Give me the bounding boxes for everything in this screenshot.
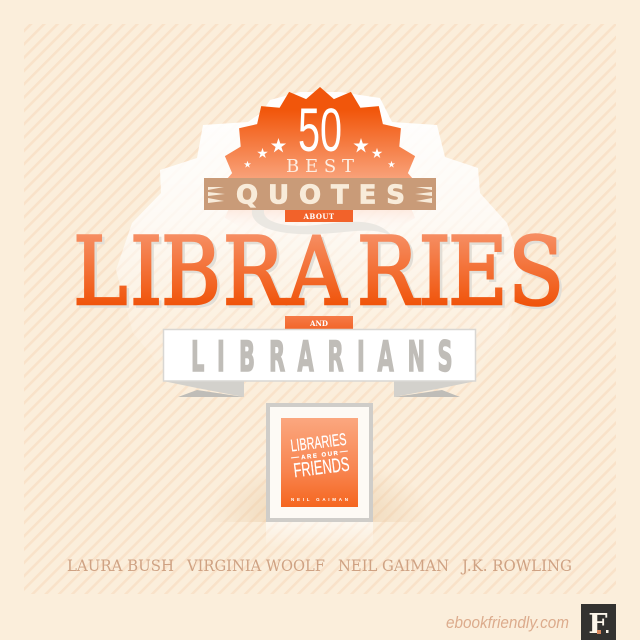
framed poster: FRIENDS [292,454,351,482]
framed poster [268,405,371,520]
QUOTES banner: QUOTES [236,180,405,210]
author names [67,557,572,575]
author names: LAURA BUSH [67,557,174,575]
LIBRARIES heading: LIBRARIES [73,217,564,326]
ABOUT tab [285,210,353,222]
framed poster: NEIL GAIMAN [291,497,348,502]
decorative swirl [252,210,392,236]
stars [244,138,395,168]
number 50: 50 [298,96,342,164]
AND tab: AND [309,319,328,328]
orange sunburst badge [220,87,420,250]
LIBRARIES heading: LIBRARIES [76,219,567,329]
white sunburst [116,92,523,430]
QUOTES banner [204,178,436,210]
logo: F [588,609,608,640]
word BEST: BEST [286,156,354,177]
framed poster: LIBRARIES [290,430,347,455]
LIBRARIANS ribbon [163,330,476,397]
ABOUT tab: ABOUT [303,212,335,221]
author names: VIRGINIA WOOLF [186,557,325,575]
floor glow [205,445,435,522]
site url: ebookfriendly.com [446,614,569,632]
logo [581,604,616,640]
LIBRARIANS ribbon: LIBRARIANS [191,332,453,381]
AND tab [285,316,353,329]
framed poster: ARE OUR [301,451,339,461]
author names: NEIL GAIMAN [338,557,449,575]
author names: J.K. ROWLING [460,557,572,575]
frame reflection [266,522,373,548]
